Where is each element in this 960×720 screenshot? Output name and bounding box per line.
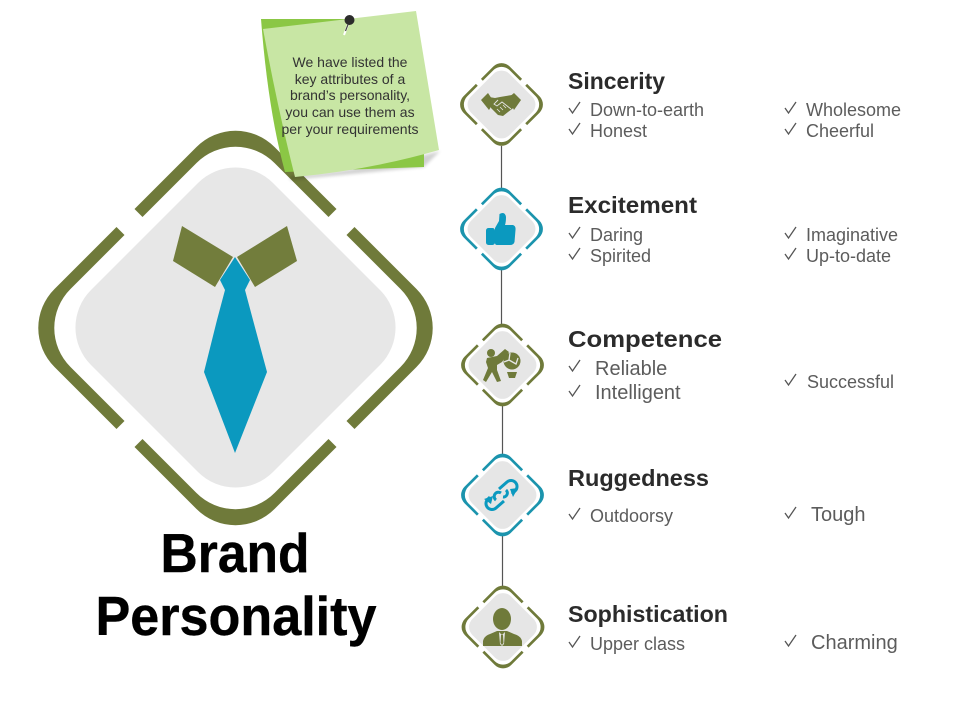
list: Tough: [811, 504, 866, 526]
main diamond frame: [38, 131, 433, 525]
list: Outdoorsy: [590, 506, 673, 526]
heading: Sophistication: [568, 601, 728, 627]
heading: Competence: [568, 326, 722, 352]
section: competence: [568, 326, 894, 404]
node background: [468, 195, 535, 263]
note text: per your requirements: [282, 121, 418, 137]
section: excitement: [568, 192, 898, 266]
node background: [468, 71, 535, 138]
pin: [344, 15, 354, 35]
section: sophistication: [568, 601, 898, 654]
list: Wholesome: [806, 100, 901, 120]
main diamond background: [75, 167, 396, 488]
note front sheet: [263, 11, 439, 177]
list: Intelligent: [595, 382, 681, 404]
node: sincerity: [460, 63, 543, 146]
list: [569, 225, 898, 266]
list: [569, 632, 898, 654]
section: sincerity: [568, 68, 901, 141]
node frame: [461, 454, 544, 536]
note shadow: [290, 151, 440, 180]
tie blade: [204, 257, 267, 453]
note text: We have listed the: [293, 54, 408, 70]
title: Personality: [96, 585, 377, 647]
node frame: [460, 188, 543, 270]
list: [569, 358, 894, 404]
list: Upper class: [590, 634, 685, 654]
sticky note: [261, 11, 440, 180]
list: [569, 504, 866, 526]
node background: [469, 331, 536, 399]
note text: key attributes of a: [295, 71, 405, 87]
node background: [469, 593, 537, 661]
icon: thumbs up: [486, 213, 516, 245]
list: Honest: [590, 121, 647, 141]
main diamond with tie: [38, 131, 433, 525]
node: sophistication: [462, 586, 544, 668]
list: Daring: [590, 225, 643, 245]
icon: businessman: [483, 608, 522, 646]
heading: Excitement: [568, 192, 697, 218]
list: Spirited: [590, 246, 651, 266]
left collar: [173, 226, 233, 287]
icon: chain with arrows: [484, 480, 518, 510]
icon: handshake: [481, 93, 521, 116]
node frame: [462, 586, 544, 668]
list: Reliable: [595, 358, 667, 380]
note text: brand’s personality,: [290, 87, 410, 103]
node: ruggedness: [461, 454, 544, 536]
list: Charming: [811, 632, 898, 654]
list: [569, 100, 901, 141]
note back sheet: [261, 19, 424, 172]
title: Brand: [160, 522, 310, 584]
list: Successful: [807, 372, 894, 392]
node frame: [461, 324, 544, 406]
list: Down-to-earth: [590, 100, 704, 120]
node: competence: [461, 324, 544, 406]
heading: Ruggedness: [568, 465, 709, 491]
icon: man carrying puzzle bulb: [483, 349, 520, 382]
connector lines: [502, 146, 503, 586]
list: Cheerful: [806, 121, 874, 141]
right collar: [237, 226, 297, 287]
heading: Sincerity: [568, 68, 665, 94]
node frame: [460, 63, 543, 146]
node background: [469, 461, 536, 529]
list: Imaginative: [806, 225, 898, 245]
section: ruggedness: [568, 465, 866, 526]
node: excitement: [460, 188, 543, 270]
note text: you can use them as: [285, 104, 415, 120]
list: Up-to-date: [806, 246, 891, 266]
title: [96, 522, 377, 647]
